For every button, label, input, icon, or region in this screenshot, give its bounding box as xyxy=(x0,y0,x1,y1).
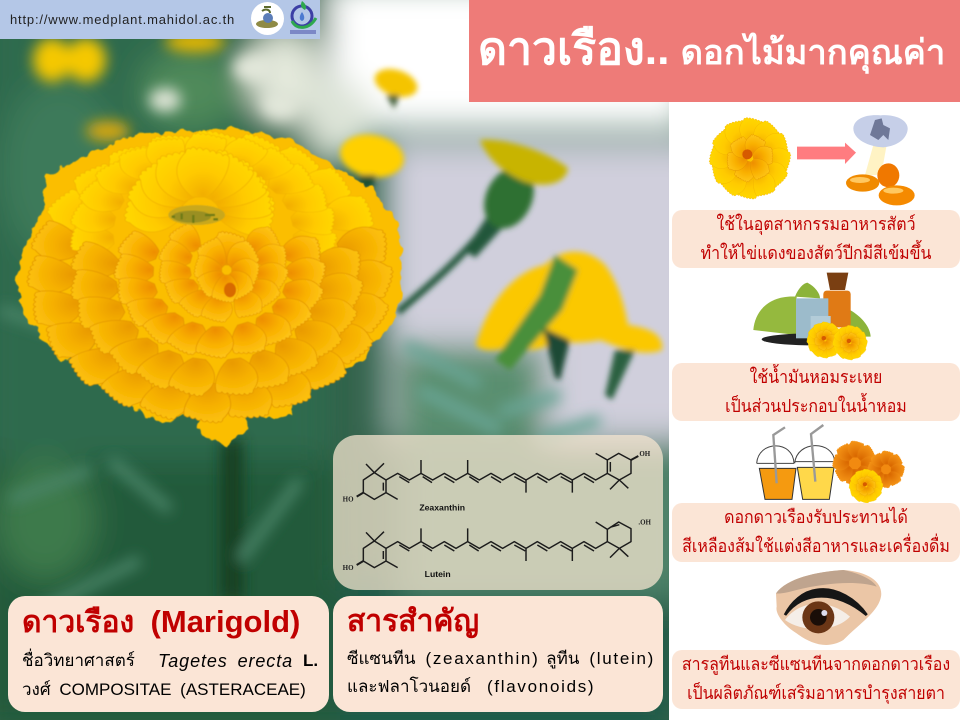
heading: marigold: ดาวเรือง (Marigold) xyxy=(22,604,300,639)
label: OH groups: HO xyxy=(343,496,354,504)
pill: edible flower xyxy=(672,503,960,562)
upper yellow ring xyxy=(68,133,339,259)
compounds line one: ซีแซนทีน (zeaxanthin) ลูทีน (lutein) xyxy=(347,649,655,668)
outer petal ring xyxy=(26,130,394,424)
panel: marigold identity xyxy=(8,596,329,712)
family name: วงศ์ COMPOSITAE (ASTERACEAE) xyxy=(22,680,306,699)
pill: animal feed: ทำให้ไข่แดงของสัตว์ปีกมีสีเข้มขึ้น xyxy=(701,243,931,263)
logo: green leaf emblem xyxy=(290,1,318,34)
icon: candles, oil bottle, leaves xyxy=(753,272,871,360)
pill: animal feed: ใช้ในอุตสาหกรรมอาหารสัตว์ xyxy=(716,214,916,234)
small blurred flower near title xyxy=(371,64,421,109)
right white column xyxy=(669,102,960,720)
website url: http://www.medplant.mahidol.ac.th xyxy=(10,12,235,27)
scientific name: Tagetes erecta xyxy=(158,651,293,671)
pill: edible flower: ดอกดาวเรืองรับประทานได้ xyxy=(724,507,908,527)
scientific name xyxy=(22,648,318,671)
flower silhouette xyxy=(17,128,402,445)
label: OH groups: .OH xyxy=(638,518,652,526)
scientific name: ชื่อวิทยาศาสตร์ xyxy=(22,651,135,670)
label: Lutein: Lutein xyxy=(425,569,451,579)
label: Zeaxanthin: Zeaxanthin xyxy=(419,502,465,512)
pill: eye supplement: เป็นผลิตภัณฑ์เสริมอาหารบำรุงสายตา xyxy=(687,683,945,703)
compounds line two: และฟลาโวนอยด์ (flavonoids) xyxy=(347,677,595,696)
icon: small marigold xyxy=(708,116,792,200)
main marigold flower xyxy=(14,125,404,448)
lower petal ring xyxy=(68,240,366,399)
side flower and buds xyxy=(337,130,662,400)
pill: edible flower: สีเหลืองส้มใช้แต่งสีอาหารและเครื่องดื่ม xyxy=(682,536,950,556)
heart petals xyxy=(192,231,263,304)
upper fan around tuft xyxy=(122,142,281,240)
scientific name: L. xyxy=(303,651,318,670)
site banner xyxy=(0,0,320,39)
flower centre tuft xyxy=(168,205,225,225)
arrow xyxy=(797,143,856,164)
inner petal ring xyxy=(156,220,291,323)
pill: essential oil: เป็นส่วนประกอบในน้ำหอม xyxy=(725,396,907,416)
pill: essential oil: ใช้น้ำมันหอมระเหย xyxy=(750,367,882,387)
icon: cracked egg and yolks xyxy=(846,115,915,205)
chemical structures drawing xyxy=(342,450,652,579)
structure: lutein xyxy=(357,522,631,568)
pill: animal feed xyxy=(672,210,960,268)
label: OH groups: OH xyxy=(639,450,651,458)
icon: drinks and flowers xyxy=(756,424,905,503)
logo: faculty seal xyxy=(251,2,284,35)
pill: eye supplement: สารลูทีนและซีแซนทีนจากดอกดาวเรือง xyxy=(682,654,950,674)
icon: eye xyxy=(776,570,882,645)
icon: marigold to egg yolk xyxy=(708,115,915,206)
pill: eye supplement xyxy=(672,650,960,709)
label: OH groups: HO xyxy=(343,564,354,572)
title text: ดาวเรือง.. ดอกไม้มากคุณค่า xyxy=(478,25,945,74)
pill: essential oil xyxy=(672,363,960,421)
structure: zeaxanthin xyxy=(357,453,638,499)
heading: key compounds: สารสำคัญ xyxy=(347,605,479,638)
panel: key compounds xyxy=(333,596,663,712)
background photo: blurred garden xyxy=(0,0,669,720)
label: OH groups xyxy=(343,450,652,572)
panel: chemical structures xyxy=(333,435,663,590)
middle petal ring xyxy=(112,229,327,359)
title banner xyxy=(469,0,960,102)
